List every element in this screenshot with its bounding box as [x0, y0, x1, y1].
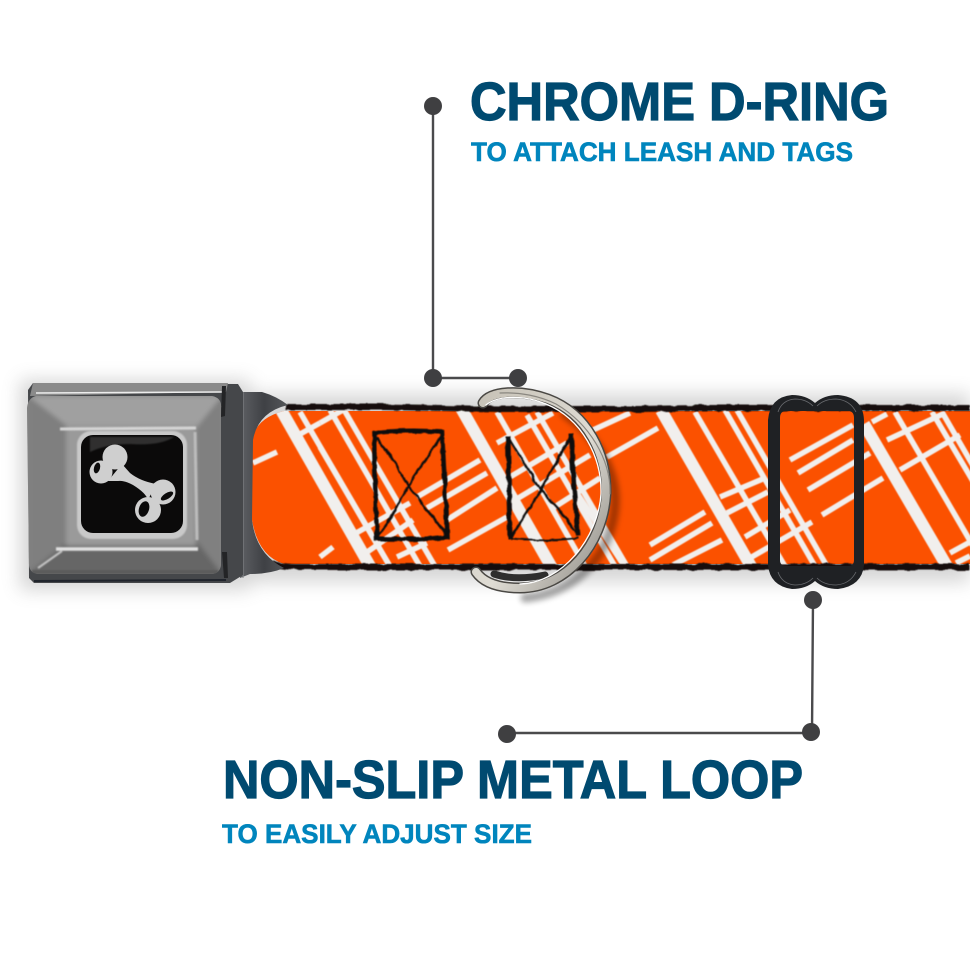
dot: elbow: [424, 369, 442, 387]
loop lower band: [780, 566, 854, 574]
narrow diagonal bands: [300, 408, 970, 575]
metal buckle connector: [240, 392, 288, 578]
subheading: adjust size: TO EASILY ADJUST SIZE: [222, 819, 532, 849]
callout connector: chrome D-ring: [424, 97, 527, 387]
dot: elbow: [802, 723, 820, 741]
seat belt buckle: [20, 383, 243, 583]
cross bands: [253, 410, 970, 565]
buckle back plate: [28, 383, 243, 583]
buckle face plate: [27, 396, 222, 574]
icon: bone: [90, 444, 176, 523]
stitched box 2: [508, 434, 578, 540]
ring shadow: [525, 414, 615, 598]
lower stitched strap border: [272, 563, 970, 567]
infographic canvas: [12, 82, 970, 844]
strap soft shadow: [20, 380, 970, 590]
upper stitched strap border: [285, 407, 970, 409]
wide diagonal bands: [280, 408, 952, 575]
bone cut-outs: [93, 462, 101, 474]
metal adjuster loop: [768, 395, 864, 589]
dot: loop anchor: [804, 591, 822, 609]
dot: heading anchor: [424, 97, 442, 115]
strap orange plaid fabric: [252, 411, 970, 564]
ring body: [476, 393, 606, 588]
chrome D-ring: [476, 393, 615, 598]
badge gloss: [90, 437, 174, 452]
dot: ring anchor: [509, 369, 527, 387]
buckle bevel highlights: [32, 428, 218, 572]
callout connector: metal loop: [498, 591, 822, 743]
ring rear tab: [494, 574, 545, 578]
heading: non-slip metal loop: NON-SLIP METAL LOOP: [223, 750, 803, 810]
black badge: [77, 431, 187, 539]
stitched box 1: [374, 431, 447, 540]
subheading: attach leash: TO ATTACH LEASH AND TAGS: [471, 137, 853, 167]
heading: chrome D-ring: CHROME D-RING: [470, 72, 889, 132]
loop highlights: [778, 399, 856, 585]
dot: heading anchor: [498, 725, 516, 743]
collar strap: [240, 405, 970, 575]
